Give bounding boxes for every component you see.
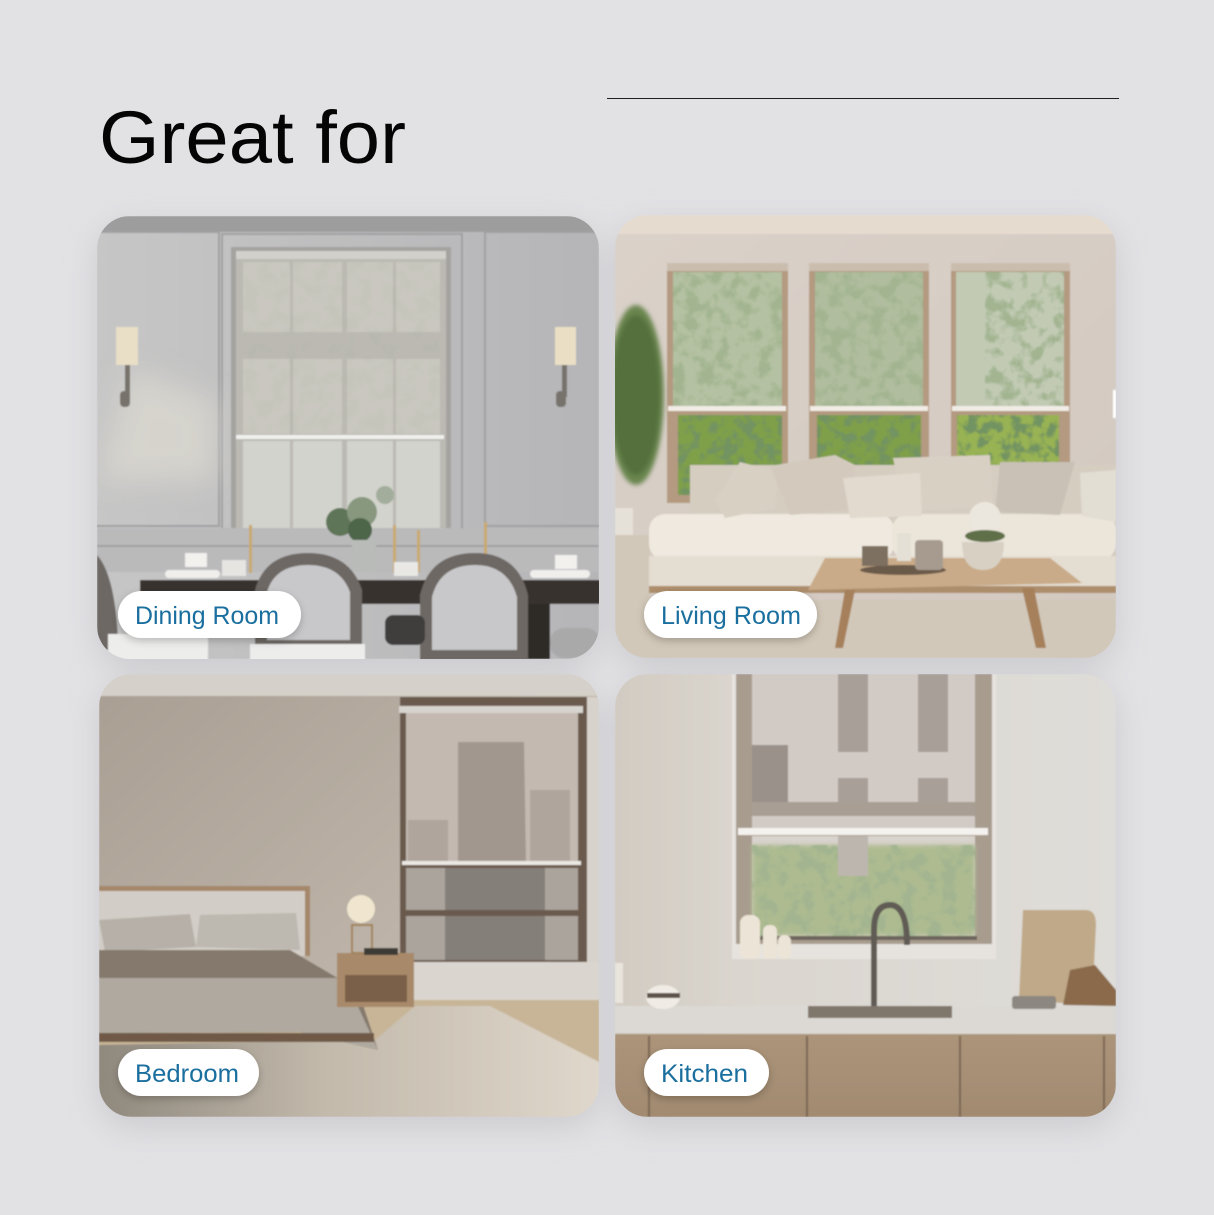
windows with shades	[667, 263, 1070, 503]
counter items	[615, 963, 680, 1009]
window with shade	[231, 247, 451, 547]
plant and candles	[249, 486, 487, 573]
panel: kitchen	[615, 674, 1116, 1117]
card shadows	[97, 225, 1116, 1127]
lower wall panelling	[98, 528, 464, 572]
panel: dining room	[90, 216, 610, 662]
label: dining room	[118, 591, 301, 638]
countertop and sink	[615, 1005, 953, 1033]
panel: bedroom	[99, 674, 599, 1117]
faucet	[874, 905, 907, 1006]
label: bedroom: Bedroom	[135, 1060, 239, 1088]
coffee table and decor	[808, 502, 1082, 648]
window with shade	[399, 697, 587, 962]
floor	[99, 1000, 599, 1062]
label: dining room: Dining Room	[135, 602, 279, 630]
header rule	[607, 98, 1119, 99]
cutting boards and plates	[1012, 910, 1116, 1009]
cabinets	[615, 1034, 1116, 1117]
potted plant	[615, 302, 667, 535]
label: kitchen	[644, 1049, 769, 1096]
sofa	[649, 455, 1116, 593]
label: living room	[644, 591, 817, 638]
panel: living room	[608, 215, 1116, 658]
vases	[739, 914, 792, 945]
table	[140, 580, 600, 604]
label: kitchen: Kitchen	[661, 1060, 748, 1088]
wall mouldings	[90, 232, 610, 534]
floor	[615, 534, 968, 658]
nightstand and lamp	[337, 895, 414, 1007]
bed	[99, 886, 378, 1050]
label: living room: Living Room	[661, 602, 801, 630]
sunlight on wall	[100, 370, 215, 480]
dining chairs	[97, 553, 600, 662]
window with shade	[732, 674, 996, 959]
rug	[99, 1006, 599, 1117]
label: bedroom	[118, 1049, 259, 1096]
wall sconces	[116, 327, 576, 407]
title: Great for	[99, 96, 406, 179]
